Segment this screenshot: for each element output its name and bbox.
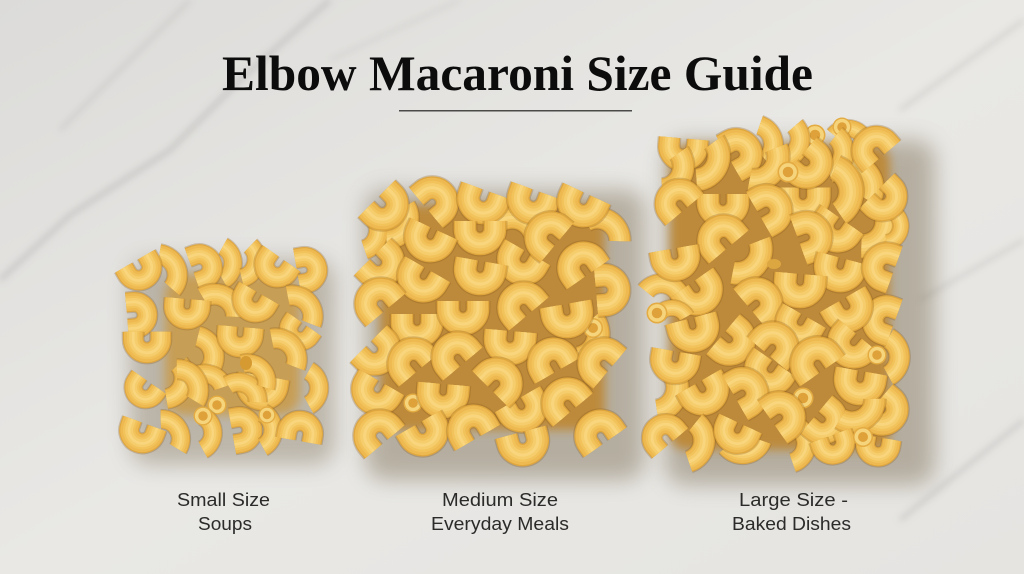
title underline xyxy=(399,110,632,112)
title: Elbow Macaroni Size Guide xyxy=(222,45,813,101)
label: medium size: Everyday Meals xyxy=(431,514,569,534)
label: medium size xyxy=(431,490,569,534)
label: small size xyxy=(177,490,270,534)
label: large size xyxy=(732,490,851,534)
label: small size: Soups xyxy=(198,514,252,534)
small macaroni pile xyxy=(124,246,335,465)
label: large size: Baked Dishes xyxy=(732,514,851,534)
medium macaroni pile xyxy=(357,182,645,480)
label: large size: Large Size - xyxy=(739,490,848,510)
label: small size: Small Size xyxy=(177,490,270,510)
large macaroni pile xyxy=(646,118,935,485)
label: medium size: Medium Size xyxy=(442,490,558,510)
